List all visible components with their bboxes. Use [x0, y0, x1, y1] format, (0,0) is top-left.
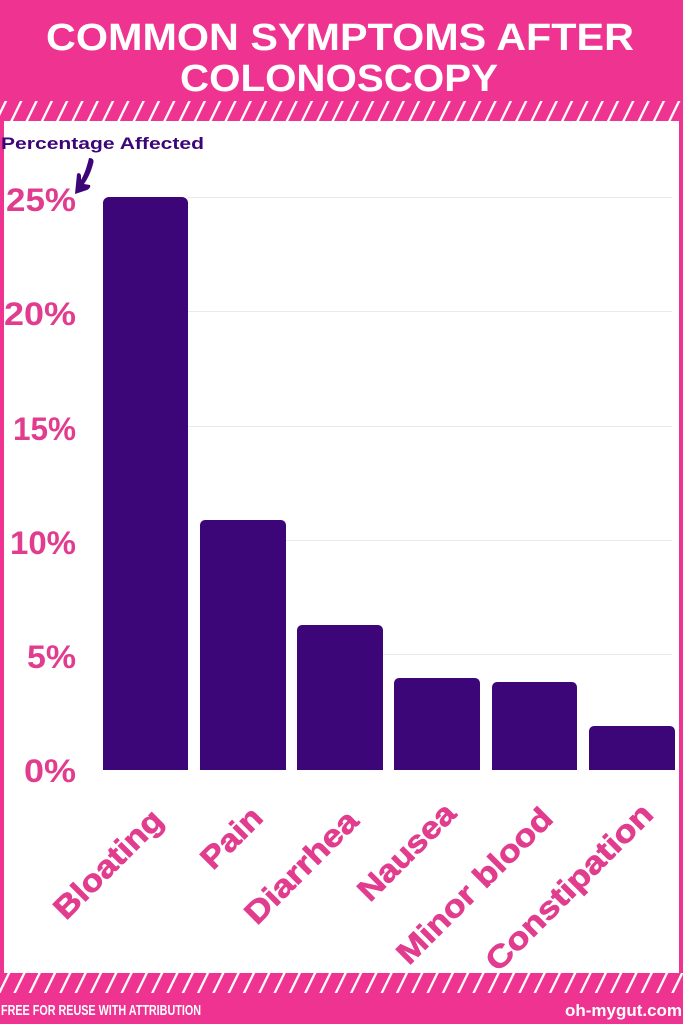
y axis labels: 15% [13, 411, 76, 447]
title [46, 17, 634, 100]
x axis labels: Nausea [350, 795, 463, 908]
title: COLONOSCOPY [180, 58, 498, 100]
y axis labels [4, 182, 76, 789]
bar chart [103, 197, 675, 770]
x axis labels [46, 795, 660, 978]
y axis labels: 0% [24, 753, 76, 789]
x axis labels: Bloating [46, 802, 170, 926]
x axis labels: Minor blood [389, 801, 560, 971]
y axis labels: 20% [4, 296, 76, 332]
x axis labels: Diarrhea [237, 802, 366, 931]
bottom stripe band [0, 973, 683, 993]
top stripe band [0, 101, 683, 121]
x axis labels: Pain [193, 800, 270, 876]
footer: website: oh-mygut.com [565, 1001, 682, 1020]
grid lines [188, 198, 672, 654]
y axis labels: 25% [6, 182, 76, 218]
icon: arrow pointing to 25% [75, 158, 94, 194]
footer: attribution: FREE FOR REUSE WITH ATTRIBUTION [1, 1002, 201, 1019]
axis title: Percentage Affected: Percentage Affected [1, 134, 204, 153]
title: COMMON SYMPTOMS AFTER [46, 17, 634, 59]
y axis labels: 5% [27, 639, 76, 675]
y axis labels: 10% [10, 525, 76, 561]
x axis labels: Constipation [478, 796, 660, 978]
